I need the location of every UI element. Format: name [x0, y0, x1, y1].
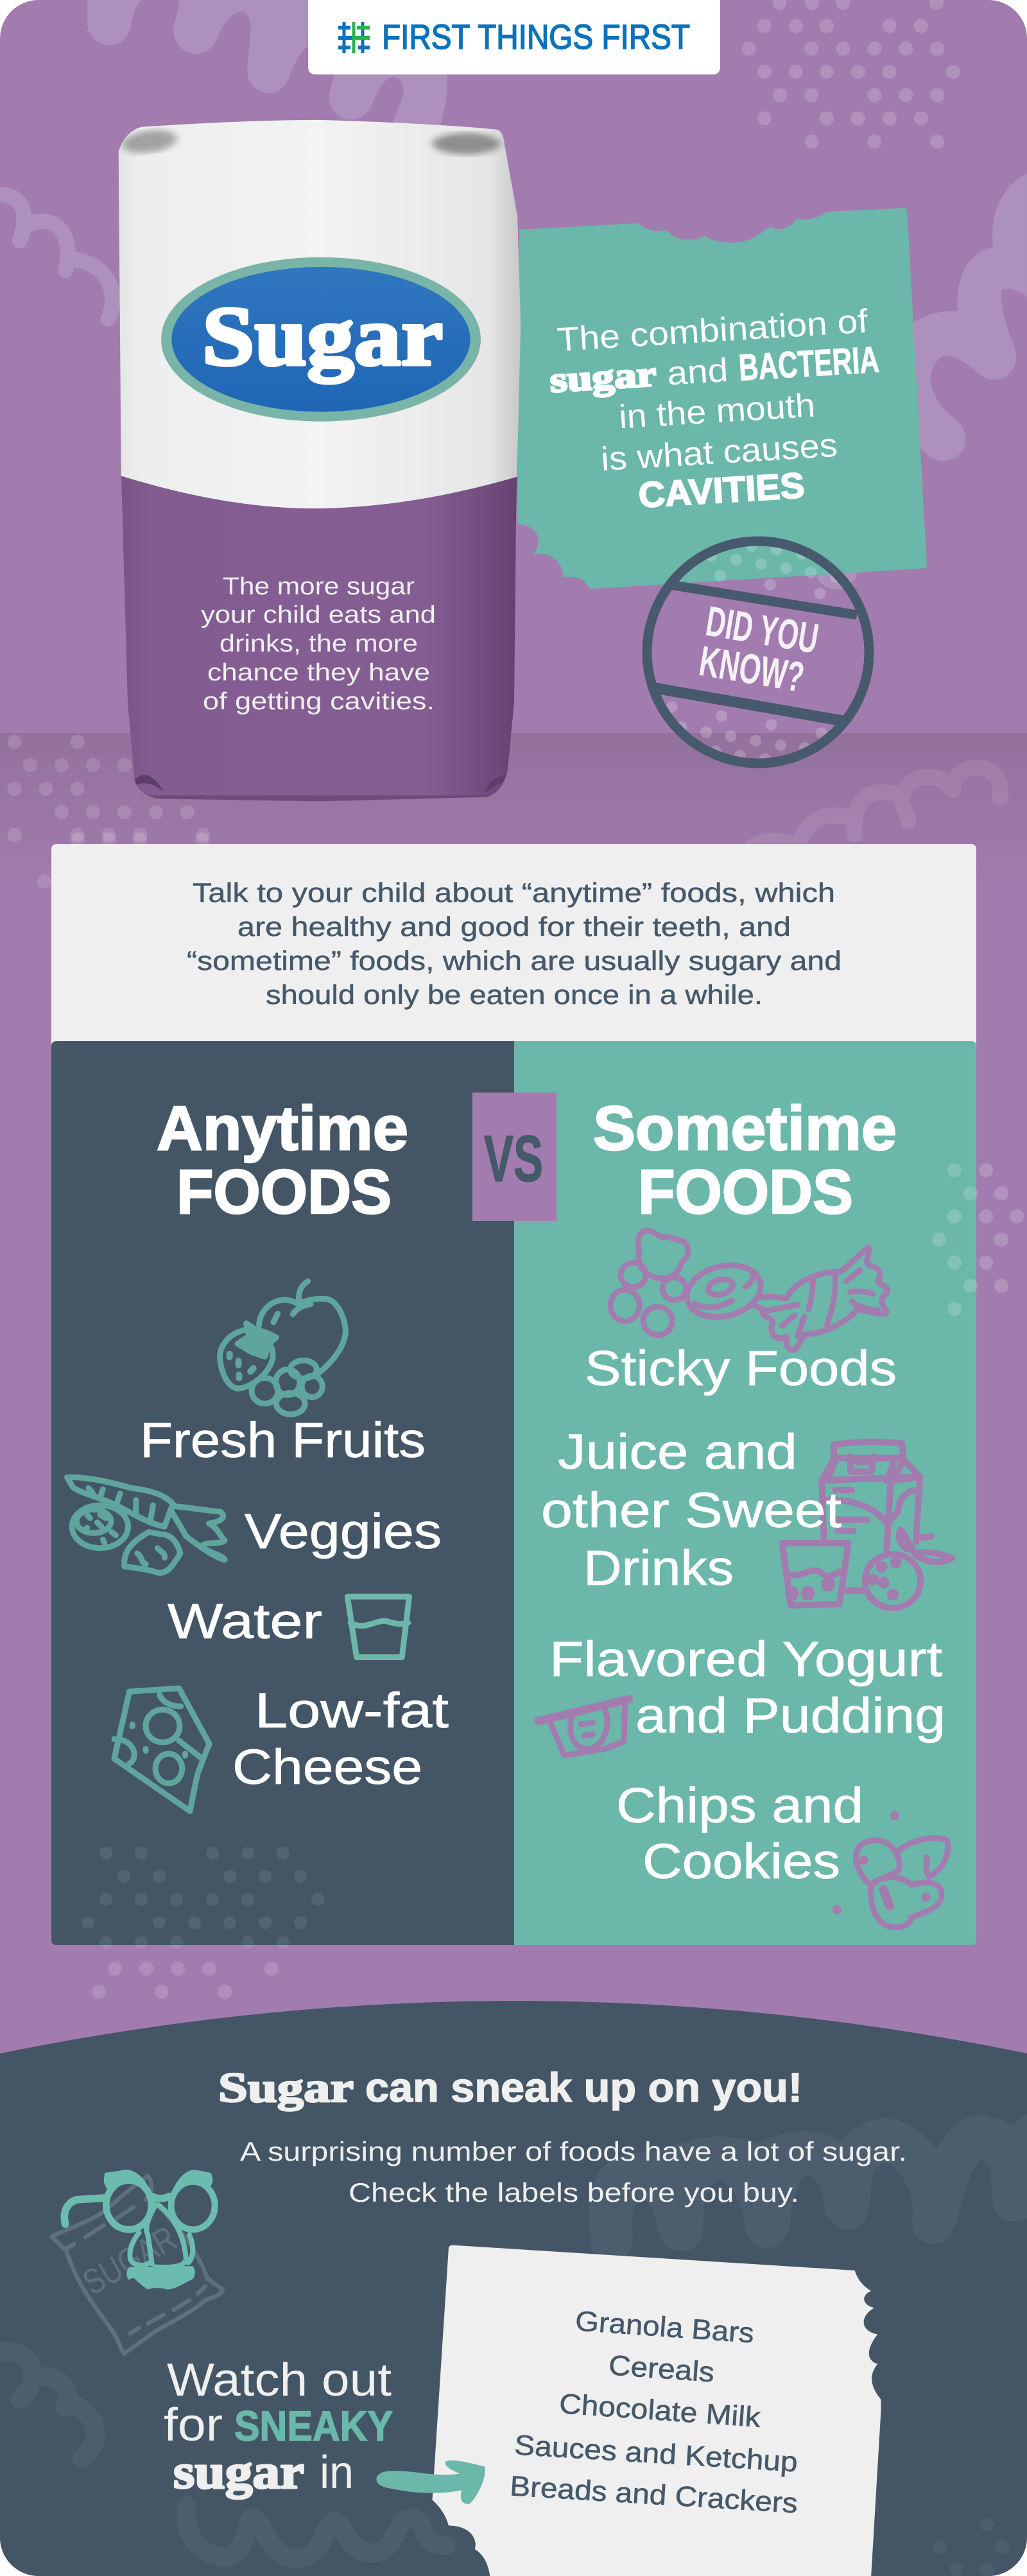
text: sneaky foods list: Breads and Crackers	[509, 2470, 798, 2520]
text: sugar fact on bag: your child eats and	[201, 601, 436, 628]
text: juice and other sweet drinks	[543, 1433, 841, 1586]
icon: disguised sugar bag: SUGAR	[76, 2218, 183, 2303]
text: sticky foods: Sticky Foods	[585, 1341, 897, 1396]
text: cavities fact: BACTERIA	[738, 338, 881, 389]
text: juice and other sweet drinks: other Sweet	[541, 1483, 841, 1538]
text: watch out for sneaky sugar: for	[164, 2399, 223, 2451]
text: did you know: DID YOU	[703, 597, 822, 662]
text: sneaky foods list	[509, 2305, 798, 2520]
panel: anytime foods	[51, 1041, 514, 1945]
heading: sugar can sneak up on you: can sneak up on you!	[365, 2064, 802, 2111]
text: sugar brand: Sugar	[202, 289, 443, 383]
icon: sticky candy	[610, 1231, 888, 1350]
text: flavored yogurt and pudding	[549, 1632, 945, 1743]
panel: teal did-you-know note	[517, 208, 927, 589]
text: sugar fact on bag: of getting cavities.	[203, 688, 435, 715]
text: sneaky foods list: Cereals	[608, 2349, 716, 2389]
text: juice and other sweet drinks: Drinks	[583, 1541, 734, 1596]
text: sugar fact on bag: drinks, the more	[220, 630, 418, 657]
text: low-fat cheese: Low-fat	[255, 1683, 449, 1738]
text: sugar fact on bag: chance they have	[207, 659, 430, 686]
text: cavities fact	[549, 308, 879, 508]
heading: sometime foods: Sometime	[593, 1093, 897, 1163]
text: did you know: KNOW?	[696, 637, 807, 701]
text: cavities fact: is what causes	[600, 427, 838, 478]
text: intro: Talk to your child about “anytime” foods, which	[193, 877, 835, 908]
text: sugar fact on bag: The more sugar	[223, 573, 415, 600]
icon: pudding cup	[539, 1699, 629, 1756]
heading: anytime foods	[157, 1103, 407, 1215]
panel: sometime foods	[514, 1041, 1017, 1945]
text: cavities fact: CAVITIES	[637, 465, 806, 515]
text: sneaky foods list: Sauces and Ketchup	[514, 2430, 798, 2478]
text: cavities fact: in the mouth	[618, 387, 816, 436]
text: cavities fact: and	[666, 352, 729, 393]
text: watch out for sneaky sugar: sugar	[173, 2445, 304, 2499]
text: cavities fact: The combination of	[556, 302, 869, 359]
icon: fruits	[220, 1281, 345, 1414]
text: fresh fruits: Fresh Fruits	[140, 1413, 426, 1468]
heading: sugar can sneak up on you: Sugar	[218, 2064, 354, 2111]
text: flavored yogurt and pudding: and Pudding	[635, 1688, 945, 1743]
heading: sometime foods: FOODS	[638, 1157, 853, 1227]
text: intro: are healthy and good for their teeth, and	[237, 912, 791, 942]
text: label advice: A surprising number of foods have a lot of sugar.	[240, 2136, 907, 2166]
text: intro: should only be eaten once in a while.	[266, 980, 763, 1010]
heading: anytime foods: Anytime	[157, 1093, 408, 1163]
badge: vs: VS	[484, 1122, 543, 1195]
text: watch out for sneaky sugar: SNEAKY	[234, 2402, 393, 2450]
text: sneaky foods list: Granola Bars	[574, 2305, 755, 2349]
text: water: Water	[168, 1594, 322, 1649]
icon: water glass	[347, 1596, 410, 1657]
text: brand name: FIRST THINGS FIRST	[382, 18, 690, 56]
heading: anytime foods: FOODS	[177, 1157, 392, 1227]
text: chips and cookies: Cookies	[643, 1834, 840, 1889]
text: cavities fact: sugar	[549, 354, 657, 401]
text: label advice: Check the labels before you buy.	[349, 2177, 799, 2208]
text: label advice	[240, 2136, 907, 2208]
arrow: to list	[376, 2460, 485, 2504]
text: intro: “sometime” foods, which are usually sugary and	[187, 946, 841, 976]
header: logo box	[308, 0, 720, 74]
icon: chips and cookies	[837, 1815, 948, 1927]
text: watch out for sneaky sugar: in	[320, 2447, 354, 2498]
text: watch out for sneaky sugar	[164, 2355, 393, 2499]
text: low-fat cheese	[235, 1691, 449, 1785]
icon: juice carton and glass	[782, 1442, 952, 1608]
icon: disguised sugar bag	[51, 2170, 223, 2354]
text: did you know	[700, 606, 819, 691]
text: watch out for sneaky sugar: Watch out	[167, 2355, 392, 2406]
illustration: sugar bag	[111, 116, 531, 806]
logo oval: sugar label	[161, 257, 481, 422]
text: veggies: Veggies	[245, 1504, 442, 1559]
text: sneaky foods list: Chocolate Milk	[558, 2388, 762, 2433]
panel: sneaky foods note	[432, 2245, 881, 2576]
badge: vs	[472, 1093, 557, 1221]
icon: veggies	[67, 1477, 225, 1573]
icon: cheese	[114, 1688, 209, 1811]
text: chips and cookies: Chips and	[616, 1778, 863, 1833]
icon: first things first mark	[338, 22, 370, 53]
text: sugar fact on bag	[201, 573, 436, 715]
text: flavored yogurt and pudding: Flavored Yogurt	[549, 1632, 942, 1687]
heading: sometime foods	[594, 1103, 895, 1215]
panel: intro card	[51, 844, 976, 1053]
badge: did you know	[647, 541, 869, 763]
panel: sneaky sugar	[0, 2001, 1027, 2576]
text: juice and other sweet drinks: Juice and	[558, 1424, 797, 1480]
text: intro	[187, 877, 841, 1010]
text: low-fat cheese: Cheese	[232, 1740, 422, 1795]
text: chips and cookies	[616, 1778, 863, 1889]
